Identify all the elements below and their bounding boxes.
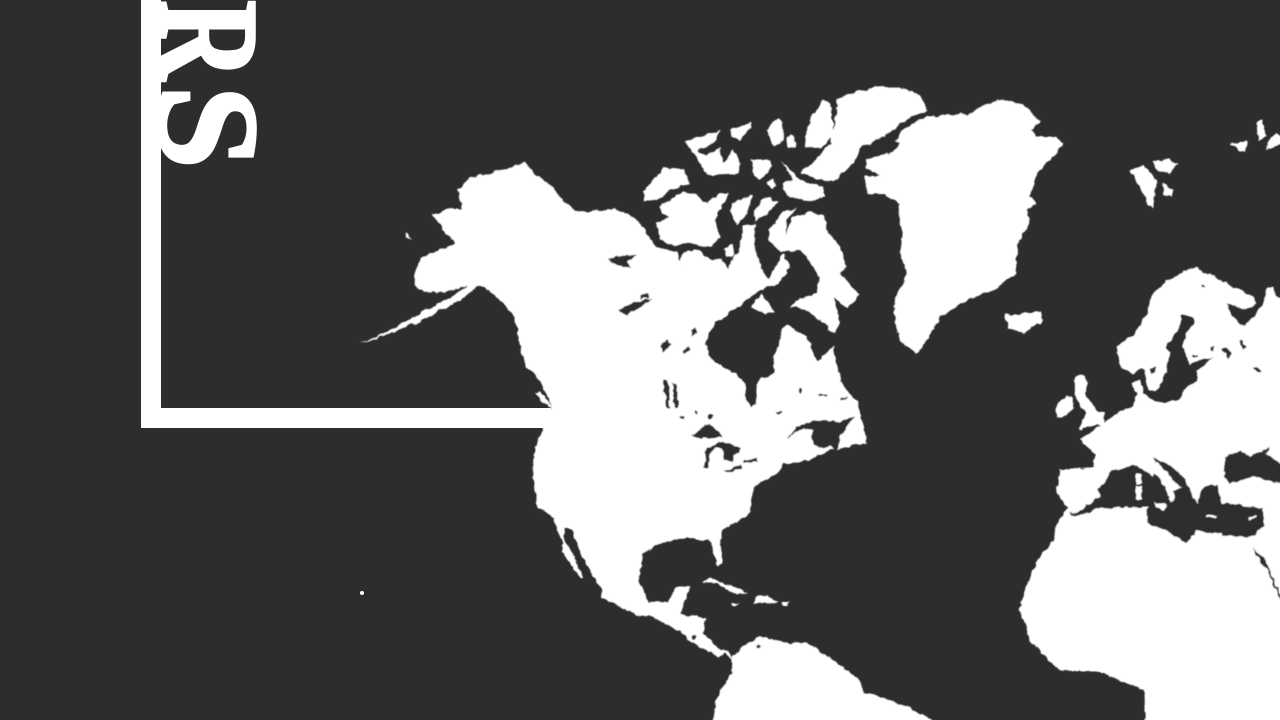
map: Sardinia and Corsica [1136,474,1142,499]
map: lakes, seas and inlets [608,254,1280,648]
title: rotated cropped letters: S [129,85,289,169]
map: Mediterranean Sea [1068,285,1280,620]
map: Queen Elizabeth Islands [685,118,825,313]
map: Greenland and Arctic islands [643,87,1063,355]
map: Crete and Cyprus [1207,515,1257,520]
map: Scandinavian lakes [1150,285,1260,374]
map: Italy [1147,462,1182,502]
map: Baltic islands and Great Britain [1075,375,1105,428]
map: Canadian and American lakes [663,380,855,648]
map: northern small lakes [640,293,698,355]
map: Africa and Arabia [1020,470,1280,720]
map: Svalbard [1130,158,1178,208]
map: Hispaniola [753,595,778,604]
map: Puerto Rico [782,603,789,606]
map: Great Slave Lake [618,299,653,315]
map: Banks Island [643,168,690,202]
map: Vancouver Island [535,392,553,407]
map: Victoria Island [657,192,728,247]
map: Europe and Scandinavia [1005,120,1280,517]
frame: white corner border [141,0,551,428]
map: North America mainland [362,163,867,660]
map: Red Sea [1252,548,1280,620]
map: Sicily [1155,503,1167,510]
title: rotated cropped letters [129,0,289,169]
map: Cuba [702,578,748,594]
world map [362,87,1280,720]
map: Axel Heiberg Island [805,100,833,148]
map: Newfoundland, Nova Scotia, Caribbean and Pacific islands [535,392,1257,606]
map: Baffin Island [768,208,860,333]
map: Hawaii [360,591,364,595]
map: Iceland [1005,311,1043,333]
map: Black Sea [1223,447,1280,487]
map: Novaya Zemlya fragments [1230,120,1280,152]
map: Great Bear Lake [608,254,637,267]
map: Jamaica [731,603,739,606]
map: South America [710,637,960,720]
title: rotated cropped letters: R [129,0,289,81]
map: small Alaskan islands [404,232,412,240]
map: Ellesmere Island [800,87,927,182]
map: Ireland [1057,397,1073,418]
